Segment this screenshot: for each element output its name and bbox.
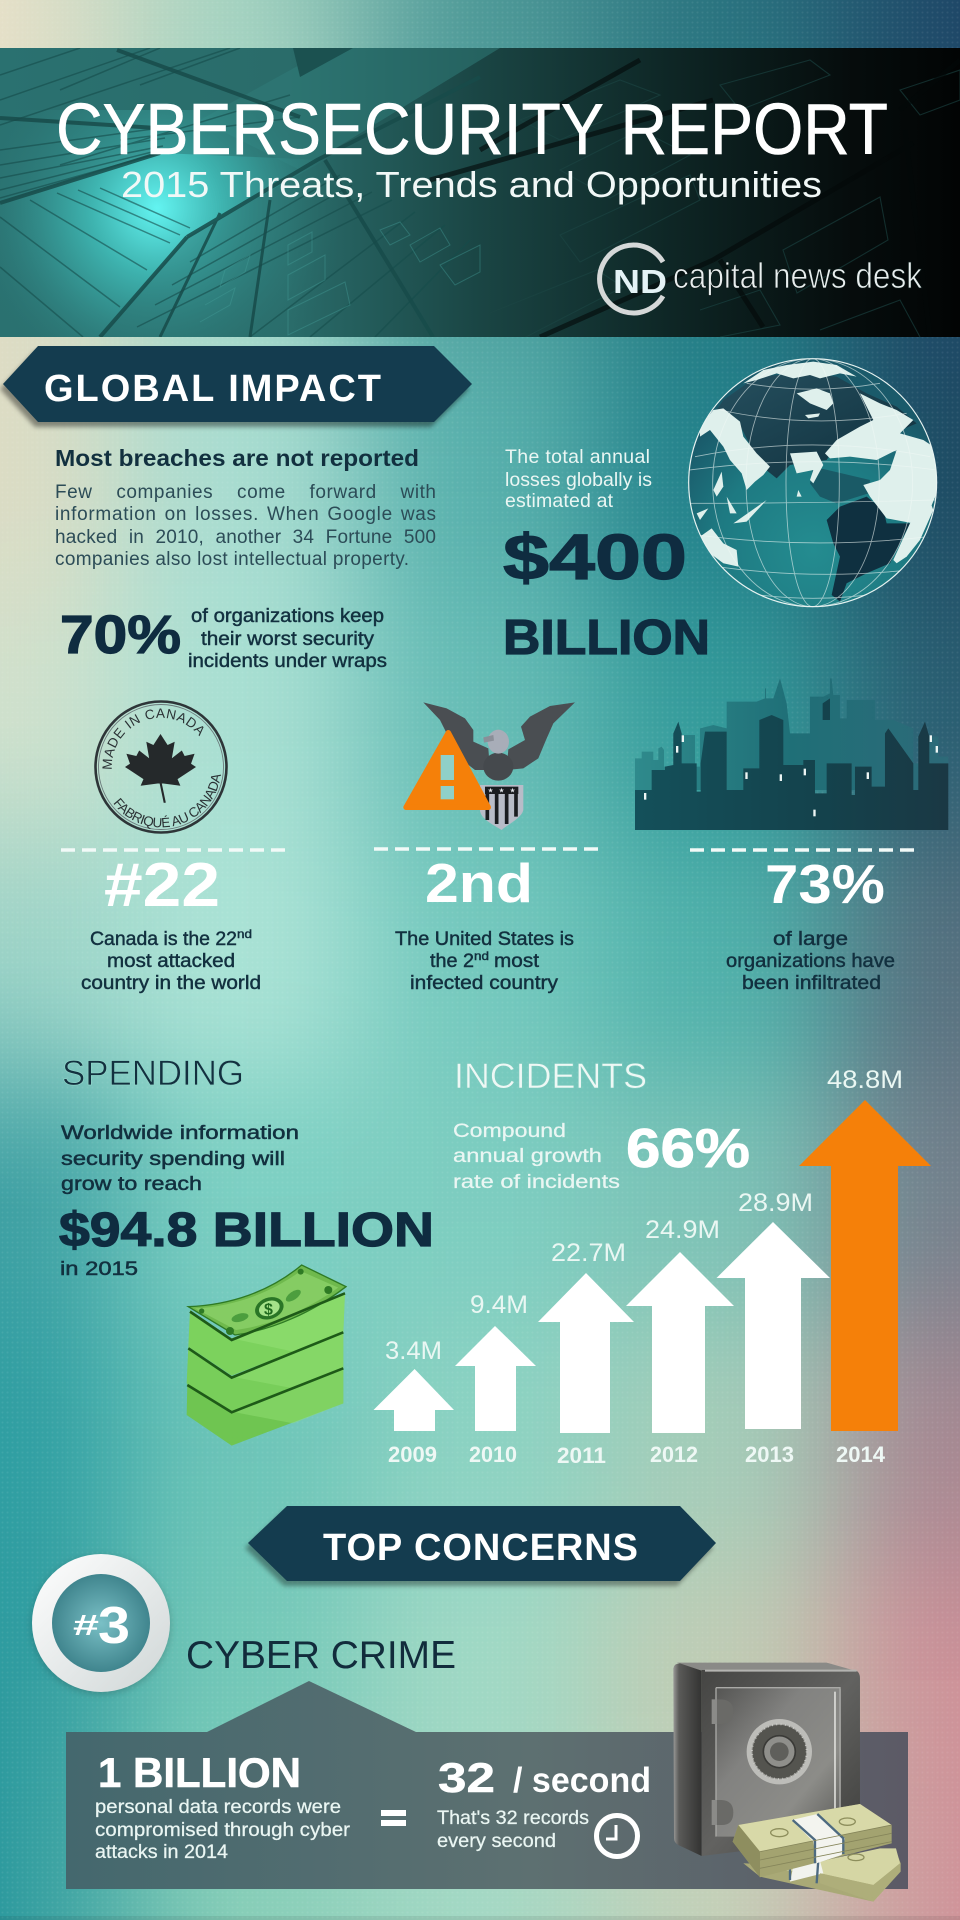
section: incidents heading: INCIDENTS [454,1057,647,1096]
stat column: large organizations: 73% [765,853,885,915]
section: spending: grow to reach [61,1173,202,1195]
stat: 70% of organizations: their worst security [201,628,374,650]
stat column: canada: most attacked [107,950,235,972]
icon: eagle with warning triangle [406,702,575,830]
stat: 32 per second: 32 [438,1754,495,1801]
stat: 32 per second: / second [513,1761,651,1800]
arrow 2011: 2011 [557,1443,606,1468]
stat: total annual losses: estimated at [505,490,614,512]
icon: made in canada stamp [94,700,228,834]
arrow 2011: 22.7M [551,1239,626,1267]
arrow 2010: 2010 [469,1442,517,1467]
arrow 2012: 24.9M [645,1216,720,1244]
stat: 70% of organizations: 70% [60,605,181,665]
icon: stack of green money: $ [264,1301,273,1318]
badge: #3: # [73,1610,99,1642]
banner: top concerns: TOP CONCERNS [323,1527,638,1569]
stat: total annual losses: The total annual [505,446,650,468]
stat column: large organizations: of large [773,928,848,950]
stat column: canada: country in the world [81,972,261,994]
text block: most breaches are not reported: hacked in 2010, another 34 Fortune 500 [55,527,436,548]
stat column: united states: most [494,950,540,972]
banner: global impact [0,346,472,427]
badge: #3: 3 [98,1597,130,1655]
arrow 2013: 2013 [745,1442,794,1467]
subtitle: 2015 Threats, Trends and Opportunities [121,164,822,205]
arrow 2014 [799,1066,931,1467]
stat: 32 per second: That's 32 records [437,1807,589,1829]
arrow 2012: 2012 [650,1442,698,1467]
stat column: united states: 2nd [425,852,533,914]
stat column: canada: nd [237,927,252,941]
stat: 32 per second: every second [437,1830,556,1852]
text block: most breaches are not reported: companies also lost intellectual property. [55,549,409,570]
icon: clock [596,1816,638,1856]
title: CYBERSECURITY REPORT [56,90,888,170]
text block: most breaches are not reported: Few companies come forward with [55,482,436,503]
arrow 2014: 48.8M [827,1066,903,1094]
arrow 2009: 2009 [388,1442,437,1467]
arrow 2013: 28.9M [738,1189,813,1217]
stat: 70% of organizations: of organizations keep [191,605,384,627]
stat: 32 per second [437,1754,651,1852]
icon: cash bundles [733,1804,901,1902]
stat column: large organizations: been infiltrated [742,972,881,994]
stat column: large organizations [690,850,914,994]
stat column: canada: Canada is the 22 [90,928,237,950]
icon: stack of green money [187,1265,346,1446]
stat: 1 billion: 1 BILLION [98,1749,301,1796]
panel: cyber crime statistics [66,1681,908,1889]
stat column: united states: The United States is [395,928,574,950]
section: spending: SPENDING [62,1054,244,1093]
section: incidents heading: rate of incidents [453,1171,620,1193]
stat: total annual losses: BILLION [503,611,710,665]
icon: steel safe [673,1663,860,1856]
stat: 1 billion [95,1749,351,1863]
stat column: united states: nd [474,949,489,963]
logo: capital news desk [600,245,923,313]
logo: capital news desk: ND [613,263,667,300]
stat column: canada: #22 [104,851,220,920]
stat: total annual losses [503,446,710,665]
globe [689,359,937,607]
text block: most breaches are not reported: information on losses. When Google was [55,504,436,525]
stat column: large organizations: organizations have [726,950,895,972]
arrow 2013 [716,1189,830,1467]
text block: most breaches are not reported [55,445,436,570]
arrow chart: incidents by year [374,1066,931,1468]
stat column: canada [61,850,287,994]
header panel: building photo with title [0,48,960,340]
arrow 2010: 9.4M [470,1291,528,1319]
stat: 1 billion: attacks in 2014 [95,1841,228,1863]
arrow 2014: 2014 [836,1442,886,1467]
icon: eagle with warning triangle: ★★★ [488,787,516,795]
stat column: united states: infected country [410,972,558,994]
arrow 2012 [626,1216,734,1467]
equals sign [381,1810,406,1826]
badge: #3 [32,1554,170,1694]
stat: 1 billion: compromised through cyber [95,1819,351,1841]
section: spending: in 2015 [60,1258,138,1280]
stat: 1 billion: personal data records were [95,1796,341,1818]
text block: most breaches are not reported: Most breaches are not reported [55,445,419,471]
stat: total annual losses: $400 [503,521,687,593]
stat: 70% of organizations [60,605,387,672]
section: spending [59,1054,434,1280]
section: incidents heading: annual growth [453,1145,602,1167]
stat column: united states [374,849,600,994]
icon: made in canada stamp: MADE IN CANADA [102,708,204,769]
icon: made in canada stamp: FABRIQUÉ AU CANADA [114,774,221,829]
banner: global impact: GLOBAL IMPACT [44,368,381,410]
section: incidents heading [453,1057,750,1193]
arrow 2009 [374,1337,454,1467]
arrow 2009: 3.4M [385,1337,442,1365]
stat: total annual losses: losses globally is [505,469,652,491]
section: spending: security spending will [61,1148,285,1170]
arrow 2011 [538,1239,634,1468]
heading: cyber crime: CYBER CRIME [186,1634,456,1677]
stat column: united states: the 2 [430,950,474,972]
section: incidents heading: Compound [453,1120,566,1142]
icon: city skyline [635,678,948,830]
section: incidents heading: 66% [626,1117,750,1179]
section: spending: Worldwide information [61,1122,299,1144]
section: spending: $94.8 BILLION [59,1204,434,1257]
logo: capital news desk: capital news desk [673,255,923,296]
stat: 70% of organizations: incidents under wraps [188,650,387,672]
arrow 2010 [455,1291,536,1467]
banner: top concerns [245,1506,716,1586]
